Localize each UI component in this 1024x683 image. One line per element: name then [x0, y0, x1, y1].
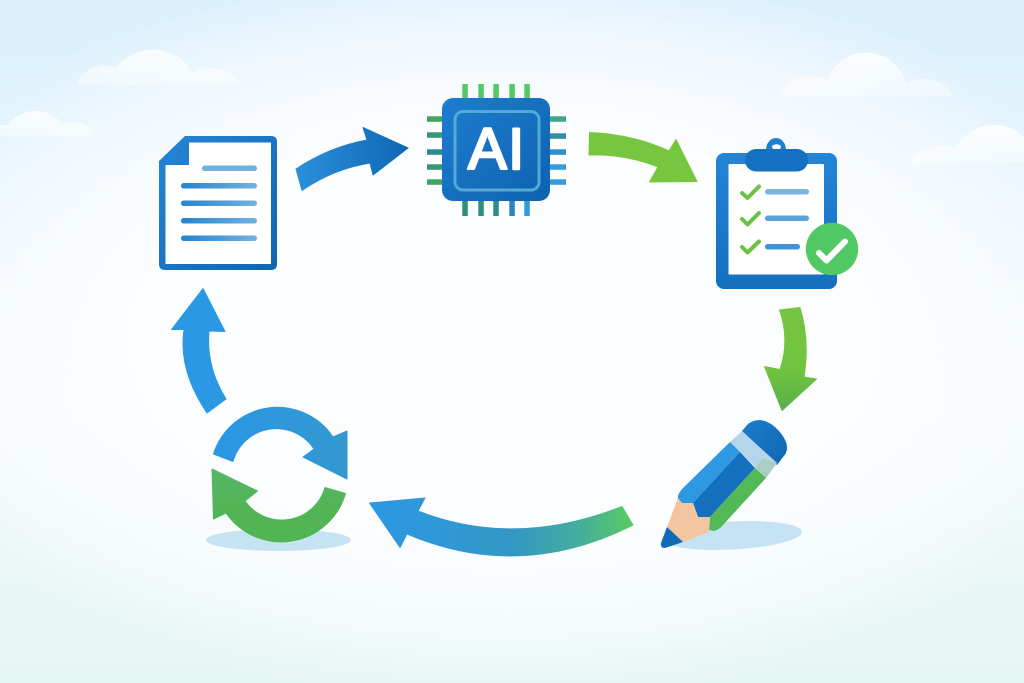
ferrule: [730, 431, 777, 478]
text lines: [181, 166, 257, 241]
shadow: pencil: [661, 518, 803, 553]
icon: clipboard: [716, 138, 858, 289]
checklist: [742, 186, 809, 252]
barrel green: [709, 468, 766, 531]
cloud: top left: [77, 50, 240, 85]
arrow: pencil to refresh: [370, 498, 633, 556]
arrow: AI to checklist: [589, 132, 697, 182]
barrel mid: [693, 452, 755, 517]
clip: [745, 138, 808, 172]
arrow: checklist to pencil: [764, 308, 816, 410]
check badge: [806, 223, 858, 275]
barrel light: [678, 442, 740, 503]
wood: [667, 498, 710, 542]
arrow: document to AI: [296, 128, 408, 190]
chip pins: [427, 84, 566, 216]
cloud: right: [911, 125, 1024, 163]
icon: pencil: [661, 420, 787, 548]
icon: document: [159, 136, 277, 270]
cloud: top right: [779, 53, 953, 96]
icon: refresh: [212, 407, 347, 542]
arrow: refresh to document: [172, 288, 226, 413]
lower arrow: [212, 469, 346, 542]
upper arrow: [214, 407, 347, 479]
tip: [661, 527, 683, 548]
shadow: refresh: [206, 529, 351, 551]
icon: AI chip: [427, 84, 566, 216]
chip label: AI: [468, 117, 526, 182]
cloud: left: [0, 111, 94, 136]
cap: [742, 420, 787, 465]
